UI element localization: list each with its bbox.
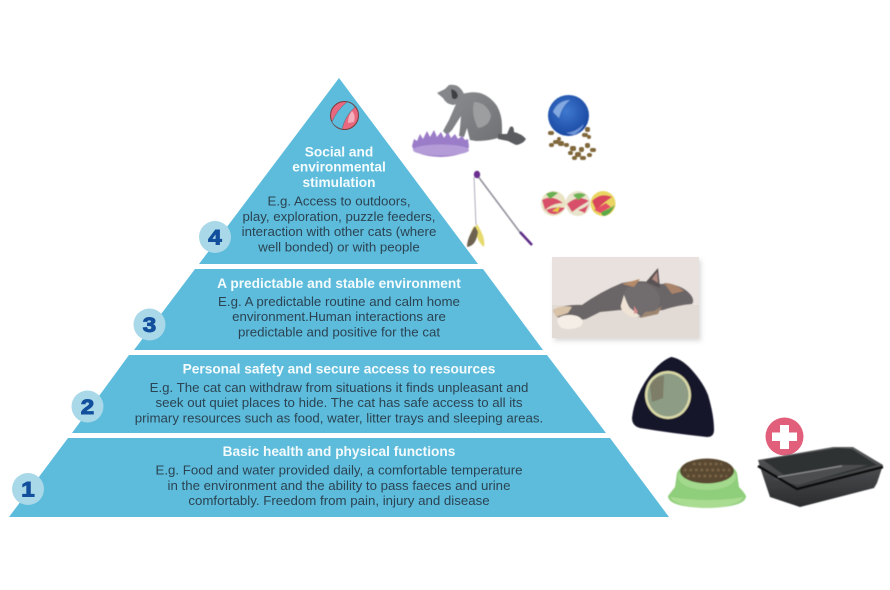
heading: tier 4: Social and bbox=[305, 144, 373, 160]
text: tier 4 description: E.g. Access to outdoors, bbox=[267, 194, 411, 208]
text: tier 4 description bbox=[242, 194, 436, 254]
text: tier 1 description: comfortably. Freedom from pain, injury and disease bbox=[188, 493, 490, 508]
text: tier 1 description: in the environment and the ability to pass faeces and urine bbox=[168, 478, 510, 493]
text: tier 2 description: seek out quiet places to hide. The cat has safe access to all its bbox=[156, 395, 523, 410]
text: tier 3 description: predictable and positive for the cat bbox=[238, 324, 440, 340]
heading: tier 1: Basic health and physical functions bbox=[223, 444, 456, 459]
heading: tier 4: environmental bbox=[292, 160, 386, 174]
text: tier 2 description: primary resources such as food, water, litter trays and sleeping areas. bbox=[135, 410, 543, 426]
badge: number 3: 3 bbox=[143, 313, 156, 337]
text: tier 4 description: play, exploration, puzzle feeders, bbox=[243, 209, 435, 224]
text: tier 4 description: well bonded) or with people bbox=[257, 240, 420, 254]
image: blue treat ball with kibble bbox=[548, 95, 596, 160]
text: tier 3 description bbox=[218, 294, 460, 340]
image: black igloo cat bed bbox=[632, 357, 714, 437]
panel: tier 4 social and environmental stimulation bbox=[199, 78, 478, 264]
image: sleeping tortoiseshell cat photo bbox=[552, 257, 701, 341]
icon: pink and blue ball bbox=[330, 102, 358, 130]
badge: number 3 bbox=[134, 308, 166, 340]
text: tier 1 description: E.g. Food and water provided daily, a comfortable temperature bbox=[156, 462, 522, 478]
text: tier 4 description: interaction with other cats (where bbox=[242, 224, 436, 239]
badge: number 2: 2 bbox=[81, 395, 94, 419]
image: three colourful balls bbox=[541, 191, 616, 216]
heading: tier 2: Personal safety and secure access to resources bbox=[183, 362, 496, 376]
panel: tier 3 predictable and stable environment bbox=[134, 269, 543, 350]
text: tier 2 description bbox=[135, 380, 543, 426]
image: grey cat with purple puzzle feeder bbox=[412, 85, 526, 157]
badge: number 1 bbox=[12, 473, 44, 505]
text: tier 1 description bbox=[156, 462, 522, 508]
heading: tier 3: A predictable and stable environment bbox=[217, 276, 461, 291]
heading: tier 4 bbox=[292, 144, 386, 190]
heading: tier 4: stimulation bbox=[302, 175, 376, 190]
panel: tier 1 basic health bbox=[9, 438, 669, 517]
badge: number 2 bbox=[72, 390, 104, 422]
text: tier 3 description: E.g. A predictable routine and calm home bbox=[218, 294, 460, 309]
icon: pink medical cross bbox=[766, 418, 804, 456]
text: tier 2 description: E.g. The cat can withdraw from situations it finds unpleasant and bbox=[150, 380, 528, 395]
image: green bowl of kibble bbox=[668, 458, 746, 508]
badge: number 1: 1 bbox=[21, 478, 35, 501]
image: dark grey litter tray bbox=[758, 447, 883, 507]
text: tier 3 description: environment.Human interactions are bbox=[232, 309, 446, 324]
panel: tier 2 personal safety bbox=[72, 355, 606, 433]
image: feather wand toy bbox=[467, 171, 532, 247]
badge: number 4: 4 bbox=[208, 226, 222, 249]
badge: number 4 bbox=[199, 221, 231, 253]
